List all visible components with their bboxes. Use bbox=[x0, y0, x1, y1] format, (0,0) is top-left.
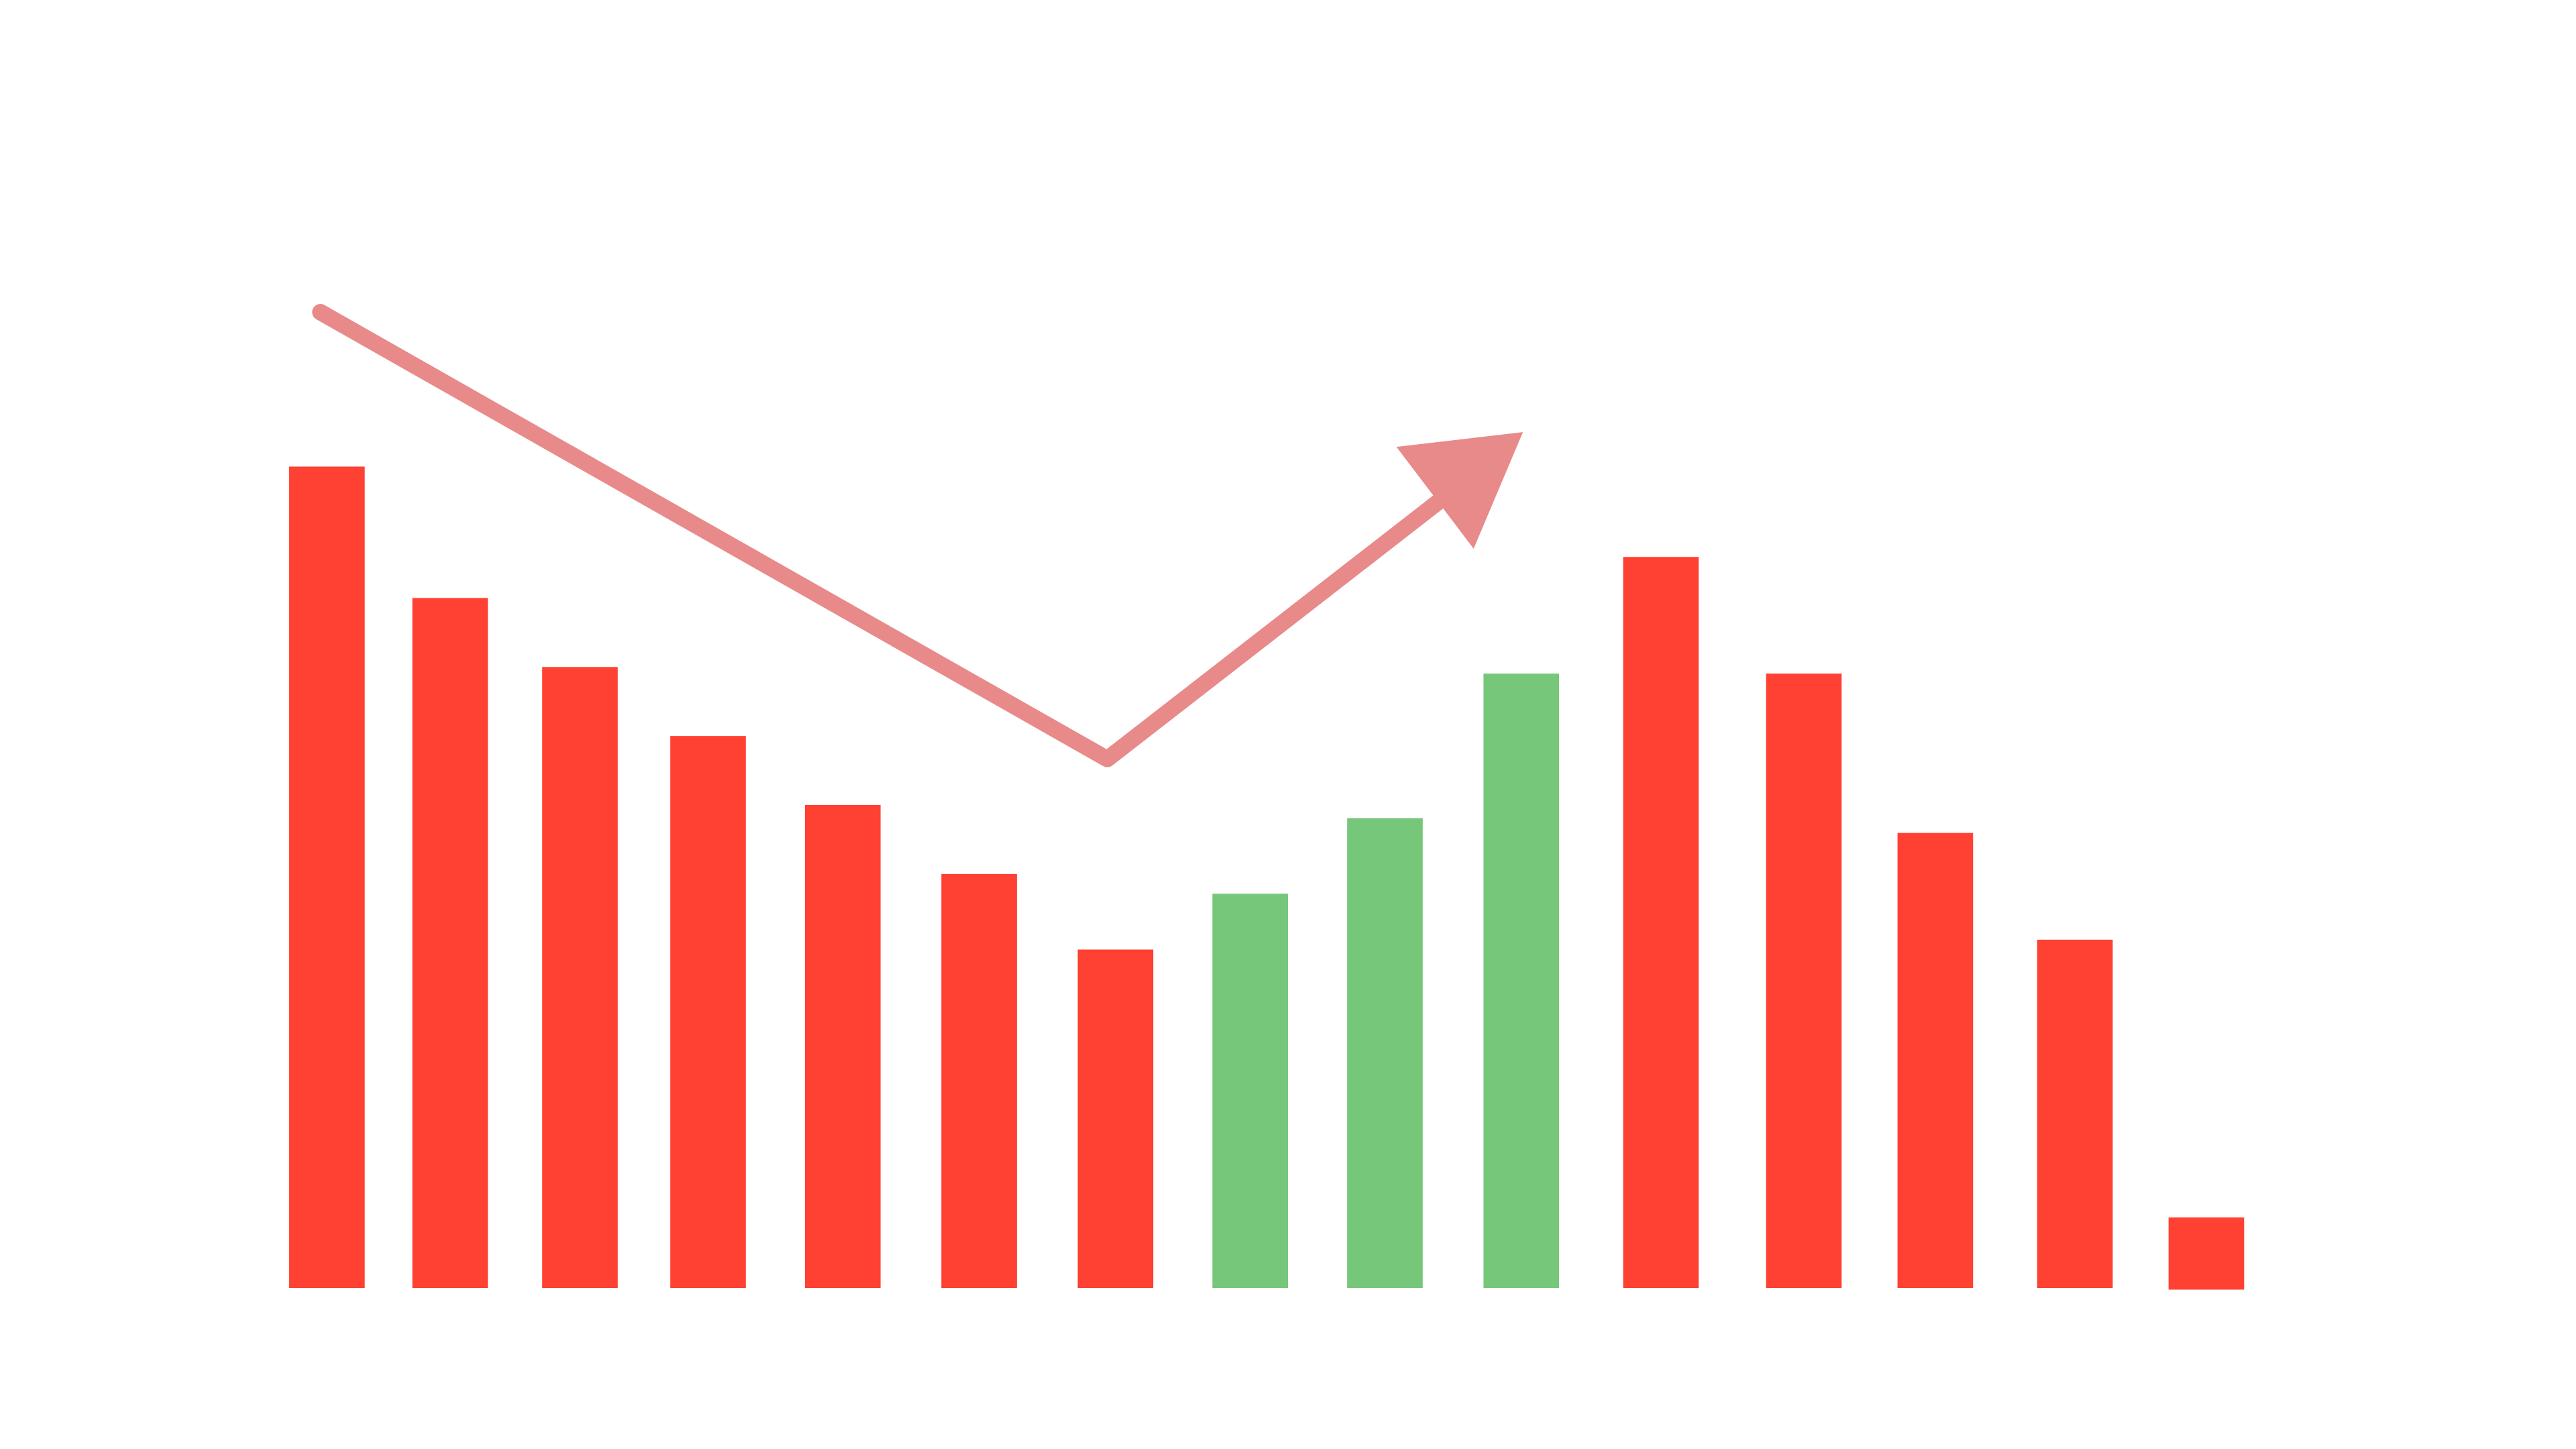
bar 2 bbox=[413, 598, 488, 1288]
bar 3 bbox=[542, 667, 618, 1288]
arrow: trend line bbox=[321, 312, 1523, 759]
bar 11 bbox=[1623, 557, 1699, 1288]
bar 6 bbox=[941, 874, 1017, 1288]
bar 4 bbox=[670, 736, 746, 1288]
bar 15 bbox=[2169, 1218, 2244, 1289]
bar 7 bbox=[1078, 950, 1153, 1288]
bar 14 bbox=[2037, 940, 2112, 1288]
bar 1 bbox=[289, 467, 365, 1288]
bar chart bbox=[289, 467, 2244, 1289]
bar 5 bbox=[805, 805, 881, 1288]
bar 12 bbox=[1766, 674, 1841, 1288]
bar 8 green bbox=[1212, 894, 1288, 1288]
bar 9 green bbox=[1347, 818, 1423, 1288]
bar 10 green bbox=[1483, 674, 1559, 1288]
bar 13 bbox=[1898, 833, 1973, 1288]
arrowhead bbox=[1397, 432, 1523, 549]
